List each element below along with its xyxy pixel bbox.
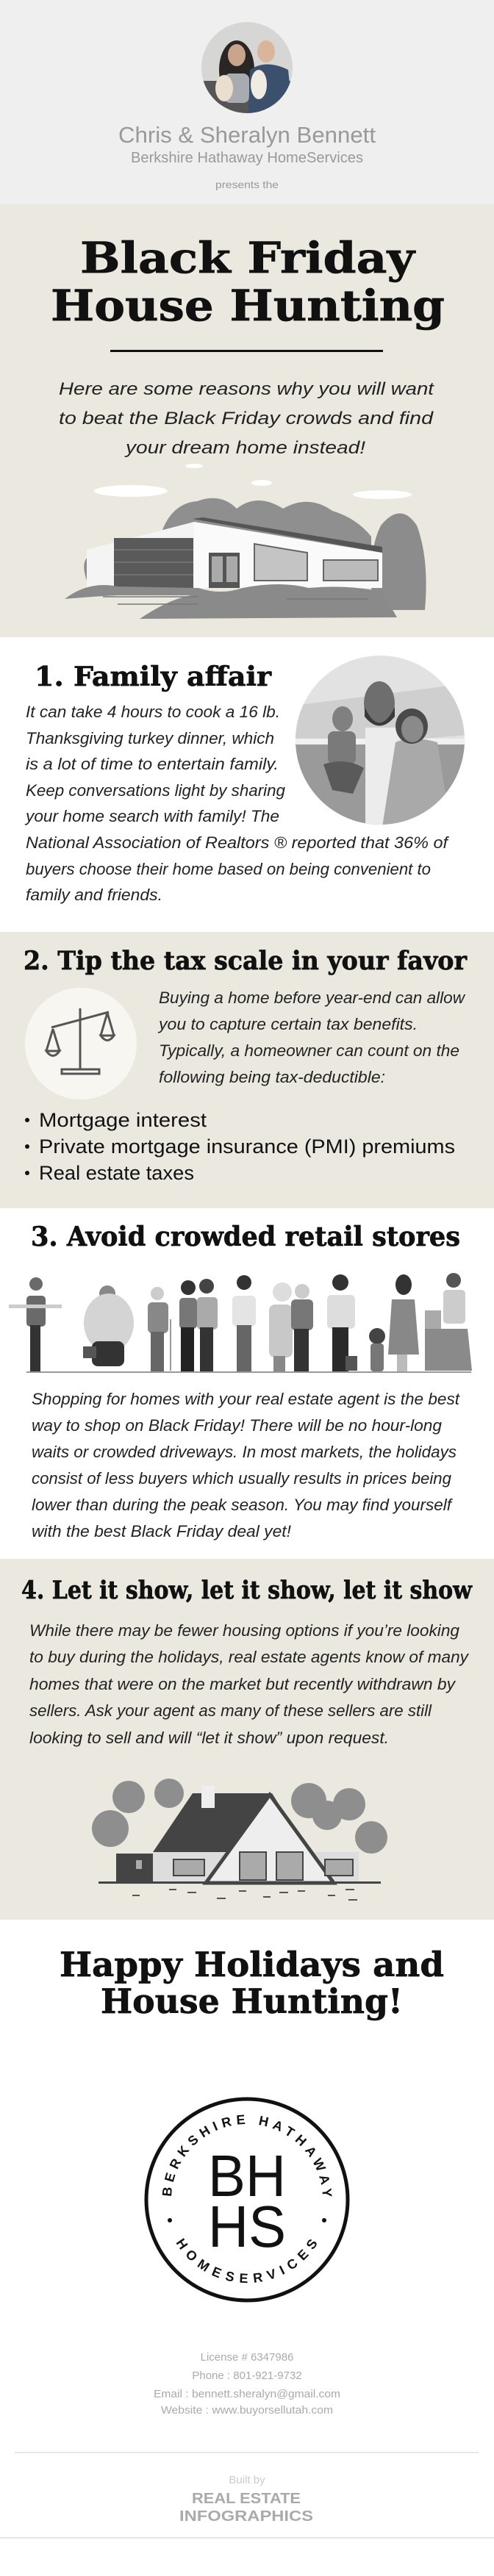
text 3: way to shop on Black Friday! There will be no hour-long	[32, 1416, 443, 1435]
closing heading: Happy Holidays and	[60, 1945, 444, 1984]
presents the: presents the	[215, 179, 279, 190]
intro text	[59, 379, 435, 458]
heading 2: 2. Tip the tax scale in your favor	[24, 946, 468, 976]
text 3: lower than during the peak season. You may find yourself	[32, 1496, 454, 1514]
footer credit	[179, 2474, 313, 2525]
contact info: Phone : 801-921-9732	[192, 2369, 302, 2382]
text 1: Keep conversations light by sharing	[26, 781, 286, 800]
agent name: Chris & Sheralyn Bennett	[118, 122, 376, 148]
text 4: looking to sell and will “let it show” upon request.	[29, 1729, 389, 1747]
illustration: family	[294, 654, 467, 827]
title: Black Friday	[80, 233, 417, 283]
text 4: sellers. Ask your agent as many of these sellers are still	[29, 1701, 432, 1720]
text 3	[32, 1390, 460, 1540]
text 1	[24, 703, 450, 904]
text 2	[157, 989, 466, 1086]
text 2: following being tax-deductible:	[159, 1068, 385, 1086]
text 3: with the best Black Friday deal yet!	[32, 1522, 291, 1540]
text 1: National Association of Realtors ® reported that 36% of	[26, 833, 450, 852]
footer credit: Built by	[229, 2474, 265, 2486]
agent photo	[201, 22, 293, 113]
bullet list: Private mortgage insurance (PMI) premiums	[39, 1135, 455, 1158]
intro text: your dream home instead!	[124, 438, 365, 458]
bullet list: Real estate taxes	[39, 1162, 194, 1184]
text 1: Thanksgiving turkey dinner, which	[26, 729, 274, 747]
logo: BHHS: BH	[208, 2143, 286, 2209]
contact info: Website : www.buyorsellutah.com	[161, 2404, 333, 2417]
text 1: It can take 4 hours to cook a 16 lb.	[26, 703, 280, 721]
closing heading	[60, 1945, 444, 2021]
intro text: to beat the Black Friday crowds and find	[59, 409, 434, 428]
bullet list: Mortgage interest	[39, 1109, 207, 1131]
footer credit: INFOGRAPHICS	[179, 2508, 313, 2525]
title: House Hunting	[51, 281, 445, 331]
illustration: A-frame house with trees	[92, 1779, 387, 1901]
closing heading: House Hunting!	[101, 1981, 403, 2021]
text 2: you to capture certain tax benefits.	[157, 1015, 418, 1033]
text 4	[29, 1621, 470, 1747]
contact info	[154, 2351, 340, 2417]
intro text: Here are some reasons why you will want	[59, 379, 435, 399]
logo: BHHS: HOMESERVICES	[176, 2238, 317, 2283]
logo: BHHS	[144, 2098, 350, 2302]
logo: BHHS: HS	[208, 2194, 286, 2259]
text 2: Buying a home before year-end can allow	[159, 989, 466, 1007]
title	[51, 233, 445, 331]
backgrounds	[0, 0, 494, 1920]
text 3: Shopping for homes with your real estate agent is the best	[32, 1390, 460, 1408]
agent company: Berkshire Hathaway HomeServices	[131, 150, 363, 166]
illustration: crowd of people	[9, 1273, 472, 1373]
illustration: modern house	[65, 464, 426, 619]
logo: BHHS: BERKSHIRE HATHAWAY	[162, 2115, 332, 2197]
text 4: to buy during the holidays, real estate agents know of many	[29, 1648, 470, 1666]
bullet list	[25, 1109, 455, 1184]
contact info: License # 6347986	[201, 2351, 293, 2364]
heading 1: 1. Family affair	[35, 661, 272, 692]
text 3: consist of less buyers which usually results in prices being	[32, 1469, 452, 1488]
text 1: your home search with family! The	[24, 807, 279, 825]
text 1: family and friends.	[26, 886, 162, 904]
icon: scale	[25, 988, 137, 1099]
text 2: Typically, a homeowner can count on the	[159, 1041, 459, 1060]
text 4: homes that were on the market but recently withdrawn by	[29, 1675, 457, 1693]
text 4: While there may be fewer housing options if you’re looking	[29, 1621, 460, 1640]
heading 3: 3. Avoid crowded retail stores	[31, 1221, 460, 1252]
footer credit: REAL ESTATE	[192, 2491, 301, 2507]
text 1: buyers choose their home based on being convenient to	[26, 860, 431, 878]
contact info: Email : bennett.sheralyn@gmail.com	[154, 2388, 340, 2400]
text 1: is a lot of time to entertain family.	[26, 755, 279, 773]
text 3: waits or crowded driveways. In most markets, the holidays	[32, 1443, 457, 1461]
